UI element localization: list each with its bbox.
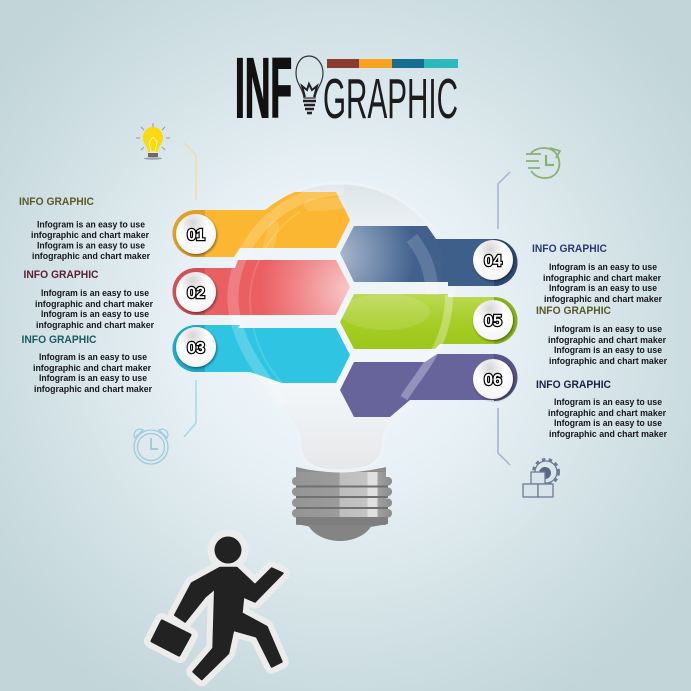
text block 3 — [22, 334, 152, 394]
body 1 — [31, 220, 150, 261]
pill 04 with number — [473, 239, 518, 286]
connector: top left — [184, 143, 196, 200]
icon: running businessman — [151, 536, 283, 679]
body 4: infographic and chart maker — [543, 273, 661, 283]
body 6: Infogram is an easy to use — [554, 418, 662, 428]
body 1: Infogram is an easy to use — [37, 240, 145, 250]
body 2: infographic and chart maker — [35, 299, 153, 309]
body 4: Infogram is an easy to use — [549, 262, 657, 272]
pill 05 with number — [473, 297, 518, 344]
pill 01 with number — [172, 210, 216, 257]
body 5: Infogram is an easy to use — [554, 345, 662, 355]
segment 03 — [173, 325, 350, 383]
pill 05 with number: 05 — [484, 313, 502, 330]
body 4 — [543, 262, 662, 304]
text block 6 — [536, 379, 667, 439]
heading 3: INFO GRAPHIC — [22, 334, 97, 346]
body 5: infographic and chart maker — [549, 356, 667, 366]
body 1: infographic and chart maker — [31, 230, 149, 240]
text block 4 — [532, 243, 662, 304]
body 2: Infogram is an easy to use — [41, 309, 149, 319]
segment 06 — [340, 354, 513, 417]
icon: gear and boxes — [523, 460, 558, 497]
segment 02 — [172, 260, 350, 315]
body 3: Infogram is an easy to use — [39, 352, 147, 362]
heading 4: INFO GRAPHIC — [532, 243, 607, 255]
bulb glass — [227, 183, 455, 471]
glass highlight rings — [233, 190, 449, 405]
icon: yellow light bulb — [136, 123, 170, 160]
body 3 — [33, 352, 152, 394]
body 1: Infogram is an easy to use — [37, 220, 145, 230]
pill 04 with number: 04 — [484, 253, 502, 270]
connector: bottom right — [498, 408, 510, 465]
segment 05 — [340, 294, 518, 349]
pill 02 with number — [172, 268, 216, 315]
text block 2 — [24, 269, 154, 330]
title bulb icon — [296, 56, 323, 113]
segment 04 — [340, 226, 518, 286]
heading 1: INFO GRAPHIC — [19, 196, 94, 208]
light bulb — [172, 183, 518, 541]
pill 03 with number — [173, 325, 216, 372]
body 5: Infogram is an easy to use — [554, 324, 662, 334]
title word GRAPHIC: GRAPHIC — [323, 67, 458, 131]
heading 6: INFO GRAPHIC — [536, 379, 611, 391]
body 3: Infogram is an easy to use — [39, 373, 147, 383]
title logo — [235, 41, 458, 135]
body 4: Infogram is an easy to use — [549, 283, 657, 293]
body 3: infographic and chart maker — [34, 384, 152, 394]
pill 01 with number: 01 — [187, 227, 205, 244]
body 2 — [35, 288, 154, 330]
body 6: Infogram is an easy to use — [554, 397, 662, 407]
body 6: infographic and chart maker — [549, 429, 667, 439]
body 6 — [548, 397, 667, 439]
body 2: Infogram is an easy to use — [41, 288, 149, 298]
body 1: infographic and chart maker — [32, 251, 150, 261]
connector: top right — [498, 172, 510, 229]
connector: bottom left — [184, 380, 196, 437]
text block 5 — [536, 305, 667, 366]
body 6: infographic and chart maker — [548, 408, 666, 418]
icon: alarm clock — [134, 429, 168, 464]
body 5: infographic and chart maker — [548, 335, 666, 345]
body 4: infographic and chart maker — [544, 294, 662, 304]
pill 03 with number: 03 — [187, 340, 205, 357]
pill 02 with number: 02 — [187, 285, 205, 302]
figure body — [152, 536, 283, 679]
figure halo — [151, 536, 283, 679]
title colour bar — [327, 59, 458, 68]
bulb base — [292, 467, 392, 541]
body 3: infographic and chart maker — [33, 363, 151, 373]
pill 06 with number: 06 — [484, 372, 502, 389]
segment 01 — [172, 192, 350, 257]
heading 2: INFO GRAPHIC — [24, 269, 99, 281]
body 2: infographic and chart maker — [36, 320, 154, 330]
icon: green fast clock — [526, 148, 560, 178]
heading 5: INFO GRAPHIC — [536, 305, 611, 317]
pill 06 with number — [473, 354, 518, 401]
text block 1 — [19, 196, 150, 261]
body 5 — [548, 324, 667, 366]
title logo: INF — [235, 41, 292, 135]
